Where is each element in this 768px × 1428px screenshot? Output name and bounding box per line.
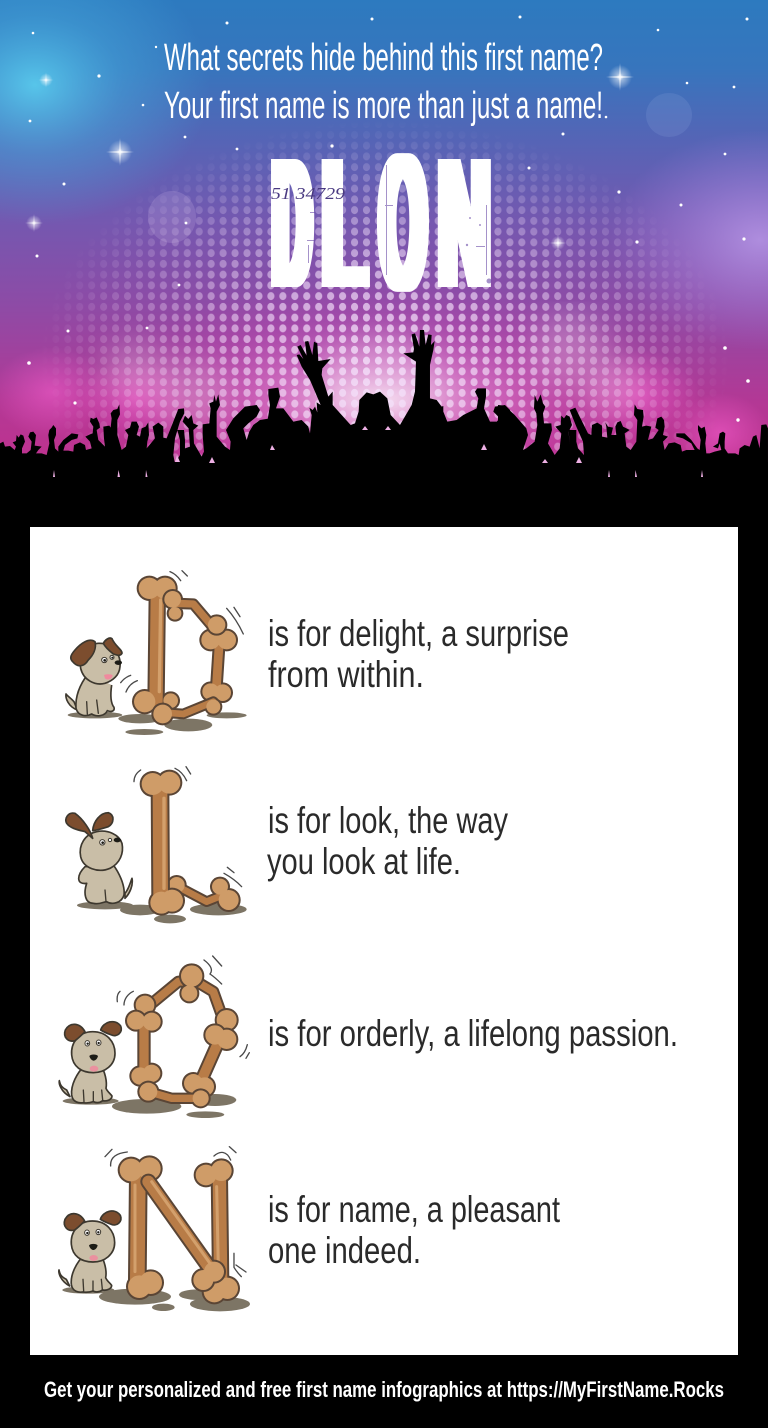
text: N <box>268 1189 561 1271</box>
text: N: one indeed. <box>268 1230 421 1271</box>
text: D: is for delight, a surprise <box>268 613 569 654</box>
text: N: is for name, a pleasant <box>268 1189 561 1230</box>
stamp number on name: 51 34729 <box>271 184 346 203</box>
title <box>164 37 603 127</box>
background: stage lights <box>0 0 768 462</box>
icon: puppy and bone letter L <box>66 767 247 923</box>
row O <box>59 956 678 1118</box>
sparkles <box>25 16 750 422</box>
crowd silhouette <box>0 330 768 528</box>
icon: puppy and bone letter N <box>59 1147 250 1311</box>
name: DLON <box>273 113 492 332</box>
name: DLON: D <box>273 120 311 327</box>
white panel <box>30 527 738 1355</box>
text: D: from within. <box>268 654 424 695</box>
text: N <box>438 120 490 327</box>
text: L: you look at life. <box>267 841 461 882</box>
name: DLON: O <box>380 113 426 332</box>
text: L: is for look, the way <box>268 800 508 841</box>
text: L <box>267 800 508 882</box>
icon: puppy and bone letter O <box>59 956 249 1118</box>
icon: puppy and bone letter D <box>66 571 247 735</box>
row N <box>59 1147 561 1311</box>
text: D <box>268 613 569 695</box>
row D <box>66 571 569 735</box>
row L <box>66 767 508 923</box>
name: DLON: L <box>322 120 367 327</box>
